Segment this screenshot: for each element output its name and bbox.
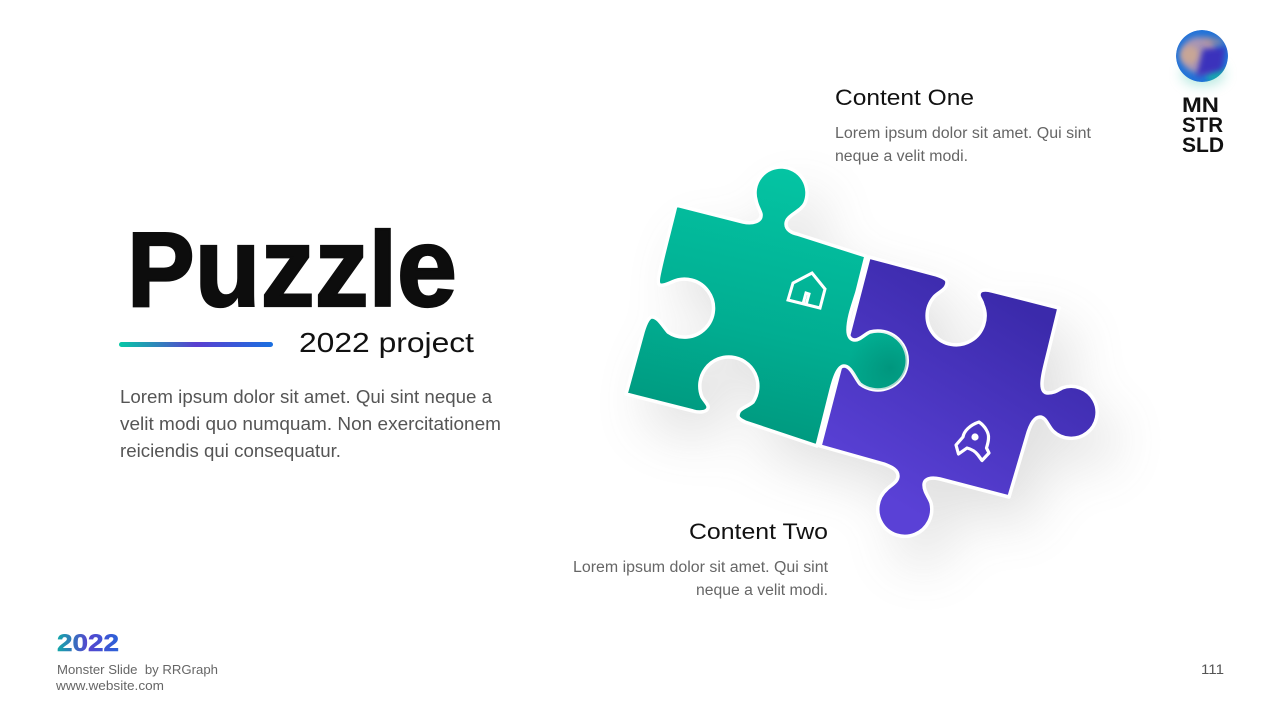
- puzzle piece: green: [626, 167, 907, 446]
- icon: rocket: [956, 422, 989, 460]
- body text: [120, 386, 501, 461]
- footer year: 2022: [57, 630, 119, 657]
- callout: content one: Lorem ipsum dolor sit amet. Qui sint: [835, 125, 1092, 142]
- logo wordmark: [1182, 94, 1224, 157]
- callout: content two: neque a velit modi.: [696, 582, 828, 599]
- puzzle piece: purple: [820, 257, 1097, 536]
- body text: Lorem ipsum dolor sit amet. Qui sint neque a: [120, 386, 493, 407]
- callout: content one: Content One: [835, 85, 974, 110]
- callout: content two: [573, 519, 829, 599]
- logo wordmark: MN: [1182, 94, 1219, 117]
- logo wordmark: SLD: [1182, 134, 1224, 157]
- callout: content one: neque a velit modi.: [835, 148, 968, 165]
- puzzle graphic: [626, 167, 1115, 564]
- footer: [55, 630, 218, 693]
- body text: velit modi quo numquam. Non exercitationem: [120, 413, 501, 434]
- logo wordmark: STR: [1182, 114, 1223, 137]
- title: Puzzle: [127, 204, 457, 330]
- footer website: www.website.com: [55, 678, 164, 693]
- callout: content two: Lorem ipsum dolor sit amet. Qui sint: [573, 559, 829, 576]
- puzzle shadow: [644, 195, 1115, 564]
- title underline: [119, 342, 273, 347]
- footer credit: Monster Slide by RRGraph: [57, 662, 218, 677]
- callout: content two: Content Two: [689, 519, 828, 544]
- body text: reiciendis qui consequatur.: [120, 440, 341, 461]
- callout: content one: [835, 85, 1092, 165]
- logo sphere: [1176, 30, 1228, 82]
- logo: [1176, 30, 1234, 157]
- subtitle: 2022 project: [299, 327, 474, 358]
- logo glow: [1181, 62, 1225, 86]
- icon: house: [788, 273, 825, 308]
- page number: 111: [1201, 661, 1224, 677]
